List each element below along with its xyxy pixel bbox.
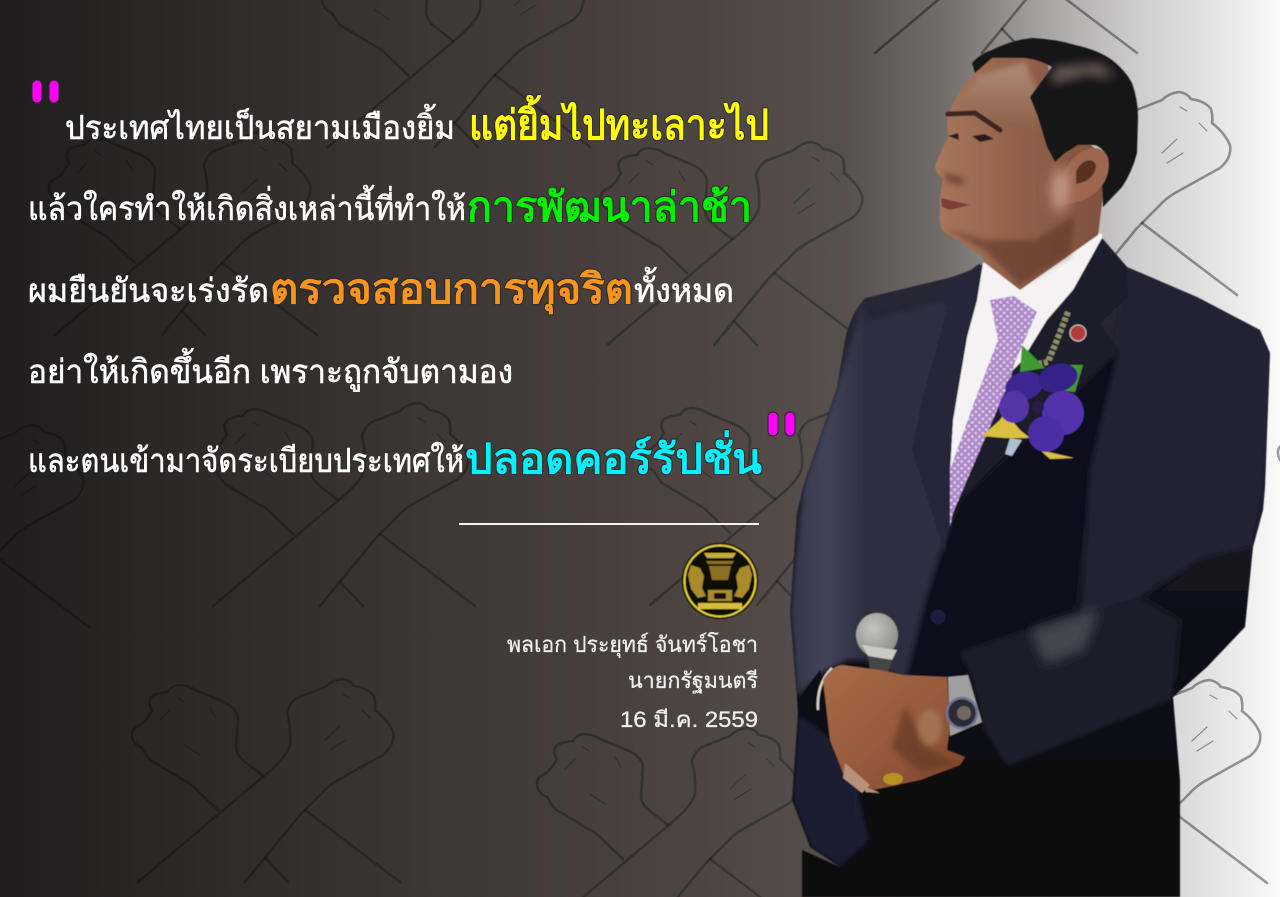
nose and jaw shade [945,172,1075,285]
leaves [1020,345,1083,392]
yellow ribbon [982,412,1074,459]
name: พลเอก ประยุทธ์ จันทร์โอชา [507,632,758,658]
line 1 white: ประเทศไทยเป็นสยามเมืองยิ้ม [65,104,455,146]
cuff and bracelet [798,670,845,765]
ear [1062,148,1109,204]
necktie [950,296,1037,527]
shirt [950,233,1104,470]
date: 16 มี.ค. 2559 [620,707,758,732]
microphone [855,613,898,815]
line 3 white end: ทั้งหมด [634,267,734,309]
right lapel [940,238,1128,553]
line 5 white: และตนเข้ามาจัดระเบียบประเทศให้ [28,442,464,479]
wristwatch [947,675,982,736]
background pattern: crossed fists, dark side [0,0,912,897]
eyes [948,133,994,142]
quote text [28,95,769,482]
clasped hands [823,665,965,790]
opening quote mark [32,80,59,103]
signature: name, title, date [507,632,758,732]
left lapel [912,263,980,553]
orchid flower [999,359,1084,452]
hair highlight [1050,64,1118,84]
lower fingers [843,763,880,793]
line 3 orange highlight: ตรวจสอบการทุจริต [270,266,633,315]
line 5 cyan highlight: ปลอดคอร์รัปชั่น [465,430,762,482]
neck and face [935,55,1108,290]
cheek highlight [1052,168,1068,212]
sprig [1032,312,1068,365]
hair [972,38,1138,207]
forehead light [955,62,1040,130]
lapel pin [1070,325,1086,341]
divider [459,523,759,525]
icon: government emblem [682,543,758,619]
suit shading [790,267,1270,867]
line 2 green highlight: การพัฒนาล่าช้า [467,184,752,230]
line 4 white: อย่าให้เกิดขึ้นอีก เพราะถูกจับตามอง [28,348,513,392]
line 3 white: ผมยืนยันจะเร่งรัด [28,272,269,309]
thumb light [918,709,942,745]
jacket button [930,609,946,625]
gold ring [883,773,903,785]
thumb shade [892,705,958,772]
title: นายกรัฐมนตรี [628,668,758,694]
eyebrow [948,113,1000,130]
closing quote mark [768,412,795,436]
jacket and trousers silhouette [790,238,1270,897]
line 2 white: แล้วใครทำให้เกิดสิ่งเหล่านี้ที่ทำให้ [28,185,466,227]
mouth [941,198,970,210]
background pattern: crossed fists, light side [869,0,1280,883]
line 1 yellow highlight: แต่ยิ้มไปทะเลาะไป [469,95,769,148]
portrait: man in dark suit [790,38,1270,897]
